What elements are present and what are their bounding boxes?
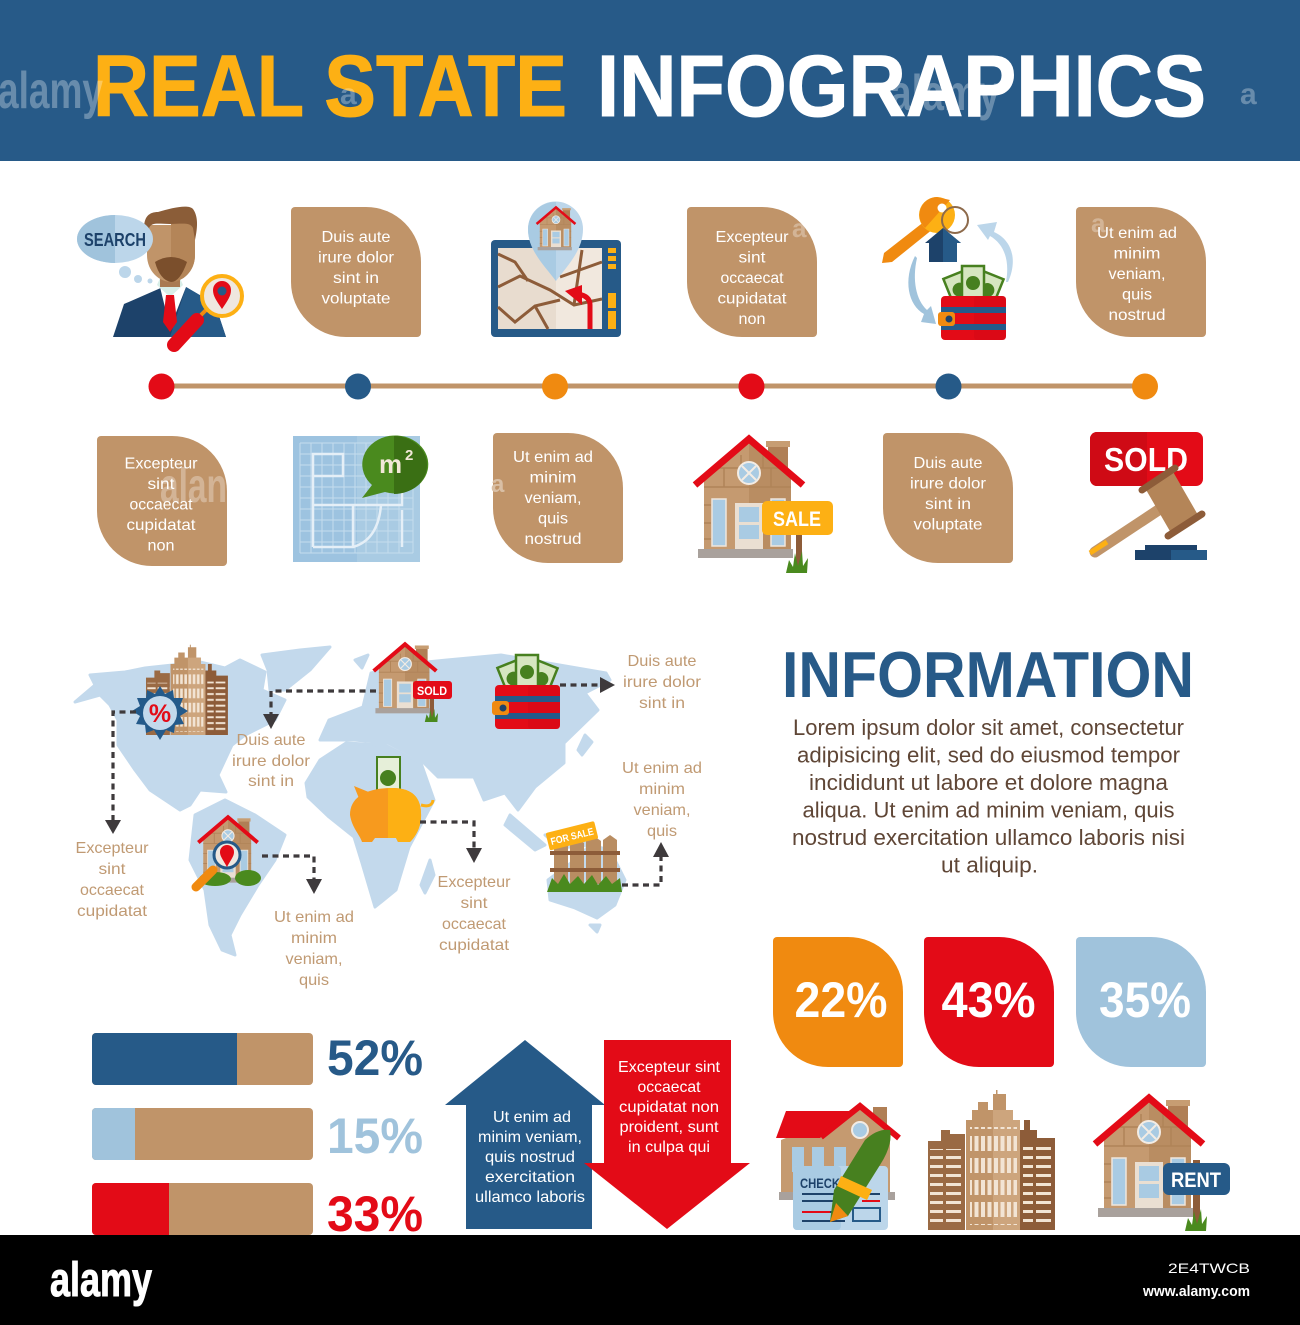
text box: excepteur: sint: [738, 250, 766, 266]
map icon: wallet: [492, 655, 560, 729]
text box: ut enim: veniam,: [1108, 266, 1166, 283]
map label: duis aute right: [623, 653, 702, 712]
footer bar: www.alamy.com: [1142, 1283, 1250, 1300]
text box: excepteur lower: Excepteur: [124, 456, 198, 472]
icon: blueprint with m2 bubble: [293, 435, 428, 562]
map label: excepteur left: [76, 840, 149, 920]
text box: duis aute lower: voluptate: [914, 516, 983, 534]
up arrow with text: exercitation: [485, 1169, 575, 1186]
up arrow with text: ullamco laboris: [475, 1189, 585, 1206]
watermark: a: [340, 78, 357, 111]
map label: ut enim australia: [622, 760, 702, 840]
text box: ut enim lower: minim: [530, 470, 576, 486]
text box: duis aute lower: Duis aute: [914, 455, 983, 472]
map icon: fence for sale: [546, 821, 622, 892]
title: [93, 38, 1206, 135]
percent tile: 35%: 35%: [1099, 972, 1191, 1028]
footer bar: 2E4TWCB: [1168, 1260, 1250, 1276]
map label: ut enim south america: minim: [291, 930, 337, 947]
map label: duis aute centre: [232, 732, 311, 790]
up arrow with text: quis nostrud: [485, 1149, 575, 1166]
icon: house with rent sign: [1095, 1098, 1230, 1231]
wallet: [938, 266, 1006, 340]
text box: ut enim lower: Ut enim ad: [513, 449, 593, 466]
heading: information: INFORMATION: [782, 638, 1194, 711]
map label: excepteur africa: occaecat: [442, 916, 507, 933]
map icon: office towers with discount: %: [149, 700, 171, 728]
text box: ut enim lower: quis: [538, 510, 568, 528]
map label: excepteur left: occaecat: [80, 882, 145, 899]
bar: 52%: 52%: [327, 1030, 423, 1086]
text box: excepteur lower: [97, 436, 227, 566]
text box: excepteur lower: alan: [160, 460, 227, 513]
text box: ut enim: [1076, 207, 1206, 337]
information paragraph: adipisicing elit, sed do eiusmod tempor: [797, 742, 1180, 768]
text box: duis aute lower: irure dolor: [910, 476, 987, 492]
icon: sold sign and gavel: SOLD: [1104, 441, 1188, 478]
down arrow with text: cupidatat non: [619, 1099, 719, 1116]
text box: duis aute lower: [883, 433, 1013, 563]
pen: [830, 1130, 891, 1222]
icon: sold sign and gavel: [1090, 432, 1207, 560]
information paragraph: ut aliquip.: [941, 852, 1038, 878]
text box: ut enim: nostrud: [1108, 307, 1166, 324]
map label: excepteur africa: cupidatat: [439, 937, 510, 954]
map label: duis aute centre: irure dolor: [232, 753, 311, 770]
check: CHECK: [800, 1175, 840, 1191]
icon: search agent: [77, 207, 242, 345]
map icon: fence for sale: FOR SALE: [550, 826, 595, 848]
percent tile: 35%: [1076, 937, 1206, 1067]
icon: map tablet with location pin: [491, 201, 621, 337]
bar: 15%: 15%: [327, 1108, 423, 1164]
percent tile: 43%: 43%: [942, 972, 1036, 1028]
title: REAL STATE: [93, 38, 567, 135]
world map: [75, 647, 625, 955]
icon: house with sale sign: SALE: [773, 508, 821, 531]
map label: excepteur left: Excepteur: [76, 840, 149, 857]
up arrow with text: Ut enim ad: [493, 1109, 571, 1126]
text box: duis aute: irure dolor: [318, 250, 395, 266]
text box: ut enim lower: nostrud: [524, 531, 582, 548]
text box: excepteur: non: [738, 311, 766, 328]
icon: house with rent sign: RENT: [1171, 1169, 1221, 1192]
speech bubble: [77, 215, 153, 284]
text box: ut enim: a: [1091, 208, 1106, 238]
map label: excepteur africa: sint: [460, 895, 488, 912]
map label: excepteur left: sint: [98, 861, 126, 878]
text box: duis aute: voluptate: [322, 290, 391, 308]
percent tile: 43%: [924, 937, 1054, 1067]
m2 bubble: 2: [405, 447, 413, 464]
map label: excepteur africa: Excepteur: [438, 874, 511, 891]
keychain house: [925, 228, 961, 262]
map icon: office towers with discount: [132, 645, 228, 740]
text box: ut enim: Ut enim ad: [1097, 225, 1177, 242]
map label: ut enim south america: quis: [299, 972, 329, 989]
arrows: [908, 222, 1013, 324]
text box: duis aute: Duis aute: [322, 229, 391, 246]
text box: ut enim lower: veniam,: [524, 490, 582, 507]
m2 bubble: [362, 435, 428, 498]
map label: duis aute centre: sint in: [248, 773, 294, 790]
map label: ut enim south america: [274, 909, 354, 989]
text box: excepteur lower: occaecat: [130, 496, 193, 514]
text box: duis aute: sint in: [333, 270, 379, 287]
footer bar: alamy: [50, 1254, 152, 1307]
title: INFOGRAPHICS: [597, 38, 1206, 135]
text box: excepteur lower: non: [148, 538, 174, 554]
percent tile: 22%: [773, 937, 903, 1067]
header banner: [0, 0, 1300, 161]
down arrow with text: occaecat: [638, 1079, 701, 1096]
map label: ut enim south america: Ut enim ad: [274, 909, 354, 926]
map label: duis aute centre: Duis aute: [236, 732, 306, 749]
information paragraph: incididunt ut labore et dolore magna: [809, 770, 1169, 795]
map label: ut enim australia: minim: [639, 781, 685, 798]
footer bar: [0, 1235, 1300, 1325]
dashed arrows on map: [105, 677, 669, 894]
bar: 15%: [92, 1108, 423, 1164]
map label: duis aute right: Duis aute: [628, 653, 697, 670]
map label: duis aute right: sint in: [639, 695, 685, 712]
text box: excepteur lower: sint: [148, 476, 175, 493]
bar: 52%: [92, 1030, 423, 1086]
timeline: [148, 374, 1158, 400]
magnifier: [174, 276, 242, 345]
icon: key, house keychain and wallet exchange: [882, 197, 1013, 340]
text box: excepteur: cupidatat: [718, 290, 787, 308]
text box: ut enim: quis: [1122, 286, 1152, 304]
map label: ut enim australia: quis: [647, 823, 677, 840]
information paragraph: [792, 715, 1185, 878]
text box: excepteur lower: cupidatat: [126, 517, 196, 534]
text box: ut enim lower: a: [491, 471, 505, 498]
watermark: alamy: [890, 65, 1000, 121]
up arrow with text: [445, 1040, 605, 1229]
map label: ut enim australia: veniam,: [634, 802, 690, 819]
icon: house with sale sign: [695, 439, 833, 573]
speech bubble: SEARCH: [84, 230, 146, 250]
text box: excepteur: Excepteur: [716, 229, 789, 246]
map icon: house with location search: [196, 817, 261, 887]
map icon: piggy bank: [350, 756, 433, 842]
text box: excepteur: occaecat: [720, 270, 784, 287]
percent tile: 22%: 22%: [794, 972, 888, 1028]
down arrow with text: proident, sunt: [620, 1119, 719, 1136]
information paragraph: aliqua. Ut enim ad minim veniam, quis: [802, 798, 1174, 822]
icon: skyscrapers: [928, 1090, 1055, 1230]
bar: 33%: [92, 1183, 423, 1242]
up arrow with text: minim veniam,: [478, 1129, 582, 1146]
watermark: a: [1240, 78, 1257, 111]
information paragraph: Lorem ipsum dolor sit amet, consectetur: [793, 715, 1184, 740]
map label: ut enim australia: Ut enim ad: [622, 760, 702, 777]
text box: excepteur: [687, 207, 817, 337]
bar: 33%: 33%: [327, 1186, 423, 1242]
down arrow with text: Excepteur sint: [618, 1059, 721, 1076]
m2 bubble: m: [379, 449, 402, 479]
text box: ut enim lower: [491, 433, 623, 563]
watermark: alamy: [0, 62, 103, 120]
text box: ut enim: minim: [1114, 246, 1160, 262]
text box: duis aute: [291, 207, 421, 337]
map label: excepteur left: cupidatat: [77, 903, 148, 920]
text box: duis aute lower: sint in: [925, 496, 971, 513]
icon: house with check and pen: [776, 1106, 899, 1230]
map label: ut enim south america: veniam,: [286, 951, 342, 968]
down arrow with text: [584, 1040, 750, 1229]
watermark: [0, 62, 1257, 121]
information paragraph: nostrud exercitation ullamco laboris nisi: [792, 825, 1185, 850]
map label: excepteur africa: [438, 874, 511, 954]
map icon: sold house: [374, 644, 452, 722]
key: [882, 197, 955, 263]
down arrow with text: in culpa qui: [628, 1139, 710, 1156]
map icon: sold house: SOLD: [417, 684, 447, 698]
text box: excepteur: a: [792, 213, 807, 243]
map label: duis aute right: irure dolor: [623, 674, 702, 691]
